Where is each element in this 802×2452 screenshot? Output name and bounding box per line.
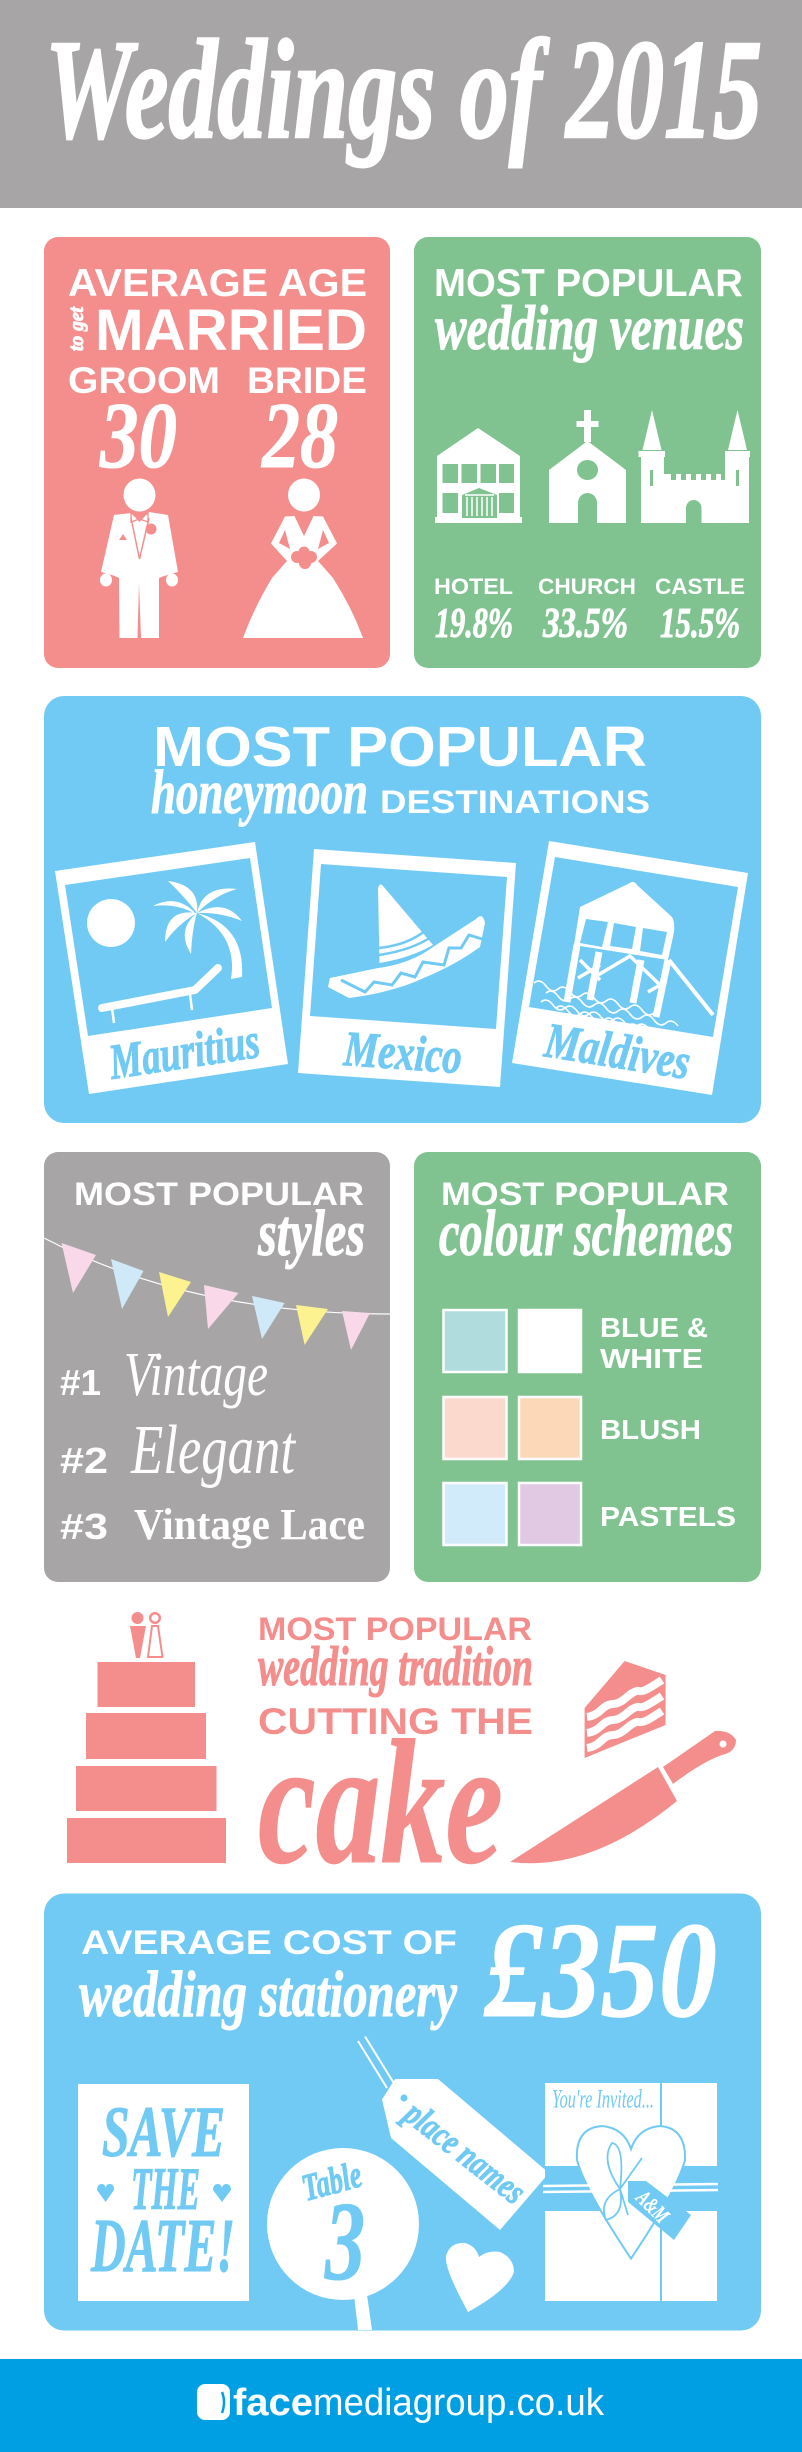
header banner [0,0,802,208]
icon: groom [100,478,178,638]
card: invitation: You're Invited... [552,2084,654,2114]
label: groom: GROOM [68,360,220,401]
polaroid: Maldives [512,841,748,1095]
heading: wedding tradition: wedding tradition [258,1636,533,1698]
scheme: blush [444,1397,701,1459]
label: church: CHURCH [538,574,636,599]
rank 2: Elegant: #2 [60,1440,108,1481]
label: hotel: 19.8% [435,601,513,647]
icon: wedding cake [67,1612,226,1863]
footer [0,2359,802,2452]
icon: knife [510,1731,736,1863]
sign: table 3: Table [297,2154,366,2210]
heading: average age: AVERAGE AGE [68,262,367,305]
label: church [538,574,636,647]
label: Maldives: Maldives [540,1011,694,1090]
number: cost: £350 [483,1894,717,2046]
icon: sombrero [328,884,485,998]
rank 2: Elegant: Elegant [130,1412,296,1489]
label: hotel: HOTEL [434,574,513,599]
heading: cake: cake [258,1703,503,1901]
scheme: blue and white: BLUE & [600,1312,708,1343]
rank 1: Vintage [60,1341,268,1409]
bunting [44,1238,390,1350]
label: castle: 15.5% [660,601,740,647]
panel: wedding venues [414,237,761,668]
tag: place names: place names [395,2091,534,2212]
heading: wedding stationery: wedding stationery [79,1958,458,2031]
icon: palm tree [153,881,242,979]
icon: heart [446,2243,514,2312]
label: castle: CASTLE [655,574,745,599]
icon: church [549,410,626,523]
icon: sun [87,899,135,947]
icon: waves [534,981,678,1035]
card: save the date: THE [131,2156,200,2222]
heading: destinations: DESTINATIONS [380,784,650,820]
label: Mexico: Mexico [341,1020,464,1084]
polaroid: Mexico [298,849,516,1087]
label: Mauritius: Mauritius [105,1012,263,1090]
panel: average age [44,237,390,668]
label: hotel [434,574,513,647]
icon: bride [243,478,363,638]
heading: most popular: MOST POPULAR [441,1176,729,1212]
text: to get: to get [64,306,88,351]
polaroid: Mauritius [55,842,288,1094]
rank 2: Elegant [60,1412,296,1489]
heading: cutting the: CUTTING THE [258,1701,533,1742]
text: website: face [233,2382,313,2424]
rank 3: Vintage Lace: #3 [60,1506,108,1547]
scheme: blue and white [444,1310,708,1374]
card: invitation: A&M [630,2184,675,2229]
scheme: pastels: PASTELS [600,1501,736,1532]
heading: most popular: MOST POPULAR [434,262,743,305]
card: save the date [78,2084,249,2301]
heading: average cost of: AVERAGE COST OF [81,1924,457,1962]
panel: honeymoon destinations [44,696,761,1123]
section: wedding tradition [67,1611,736,1901]
icon: beach hut [567,882,713,1017]
panel: styles [44,1152,390,1582]
rank 3: Vintage Lace: Vintage Lace [134,1500,365,1549]
scheme: pastels [444,1483,736,1545]
icon: castle [638,410,750,523]
card: save the date: DATE! [90,2204,235,2288]
rank 1: Vintage: Vintage [124,1341,268,1409]
card: save the date: SAVE [102,2092,225,2172]
label: castle [655,574,745,647]
card: invitation [543,2083,718,2301]
number: groom age: 30 [99,384,177,488]
heading: most popular: MOST POPULAR [258,1611,532,1647]
sign: table 3 [267,2148,419,2330]
icon: hotel [435,428,522,523]
number: bride age: 28 [260,384,338,488]
icon: sun lounger [102,968,218,1023]
scheme: blush: BLUSH [600,1414,701,1445]
heading: honeymoon: honeymoon [151,759,368,827]
panel: wedding stationery [44,1894,761,2330]
tag: place names [358,2036,549,2230]
icon: logo [197,2384,230,2420]
rank 1: Vintage: #1 [60,1362,101,1403]
heading: most popular: MOST POPULAR [153,715,647,779]
label: bride: BRIDE [247,360,367,401]
icon: cake slice [585,1661,666,1758]
label: church: 33.5% [542,601,628,647]
sign: table 3: 3 [324,2180,365,2304]
heading: styles: styles [257,1197,365,1270]
scheme: blue and white: WHITE [600,1343,703,1374]
text: website: mediagroup.co.uk [313,2382,605,2424]
heading: married: MARRIED [95,298,367,363]
heading: most popular: MOST POPULAR [74,1176,364,1212]
panel: colour schemes [414,1152,761,1582]
